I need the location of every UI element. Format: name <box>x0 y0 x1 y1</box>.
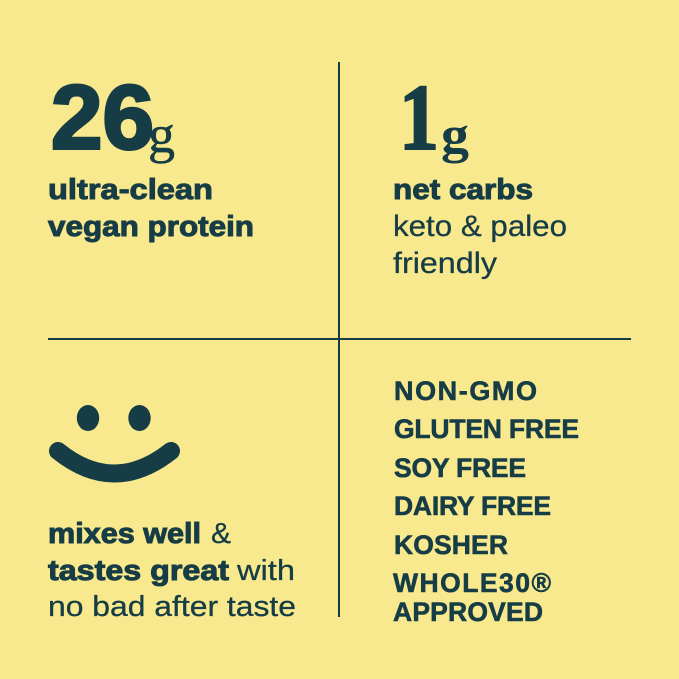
panel: certifications list: APPROVED <box>393 597 543 627</box>
taste description: mixes well <box>48 518 201 550</box>
panel: taste <box>48 405 296 623</box>
stat: 1g <box>399 66 469 170</box>
panel: certifications list: GLUTEN FREE <box>394 414 579 444</box>
taste description: with <box>236 555 295 587</box>
net carbs description <box>393 174 567 280</box>
protein description <box>48 174 254 243</box>
net carbs description: keto & paleo <box>393 210 567 243</box>
panel: certifications list: DAIRY FREE <box>394 491 551 521</box>
stat: 26g: 26 <box>51 68 154 168</box>
taste description: & <box>211 518 231 550</box>
stat: 1g: 1 <box>399 66 439 170</box>
panel: certifications list: KOSHER <box>394 530 508 560</box>
net carbs description: friendly <box>393 247 497 280</box>
icon: smiley face <box>58 405 171 474</box>
panel: certifications list: NON-GMO <box>394 376 537 406</box>
protein description: ultra-clean <box>48 174 213 206</box>
taste description <box>48 518 296 623</box>
stat: 26g: g <box>148 106 175 164</box>
stat: 1g: g <box>441 107 469 164</box>
net carbs description: net carbs <box>393 174 533 206</box>
panel: certifications list: WHOLE30® <box>393 568 551 598</box>
taste description: no bad after taste <box>48 591 296 623</box>
protein description: vegan protein <box>48 211 254 243</box>
panel: certifications list: SOY FREE <box>394 453 526 483</box>
panel: protein <box>48 68 254 243</box>
taste description: tastes great <box>48 555 229 587</box>
panel: net carbs <box>393 66 567 280</box>
panel: certifications list <box>393 376 579 627</box>
